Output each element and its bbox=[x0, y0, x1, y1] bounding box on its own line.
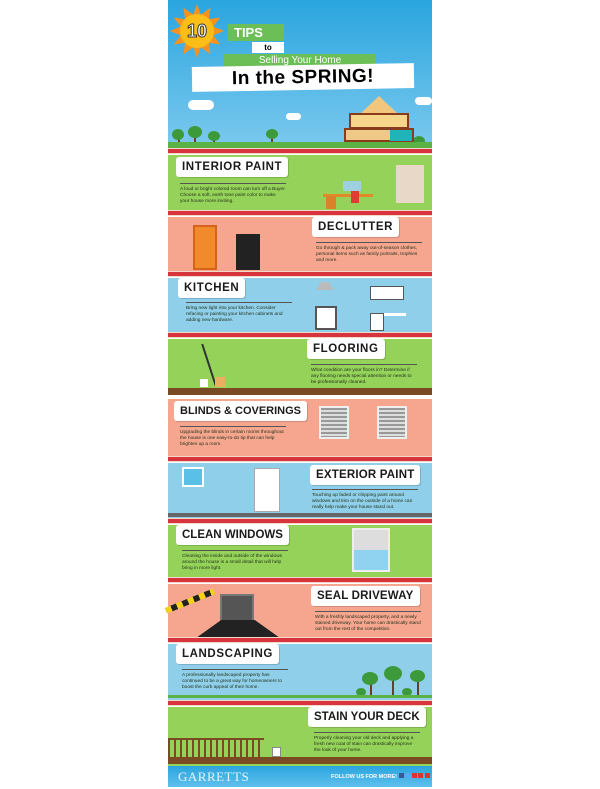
panel: exterior paint bbox=[168, 463, 432, 519]
heading bbox=[176, 644, 279, 664]
heading bbox=[176, 525, 289, 545]
icon: closet bbox=[236, 234, 260, 270]
icon: broom bbox=[201, 344, 217, 386]
text block: Cleaning the inside and outside of the windows around the house is a small detail that will help bring in more light. bbox=[182, 554, 282, 571]
title: to: to bbox=[264, 43, 272, 52]
text block: What condition are your floors in? Determine if any flooring needs special attention or needs to be professionally cleaned. bbox=[311, 368, 412, 385]
heading bbox=[178, 278, 245, 298]
title: Selling Your Home: Selling Your Home bbox=[259, 55, 341, 66]
floor bbox=[168, 388, 432, 395]
icon: window bbox=[182, 467, 204, 487]
icon: cabinets bbox=[370, 286, 404, 300]
heading: INTERIOR PAINT bbox=[182, 161, 282, 173]
panel: flooring bbox=[168, 339, 432, 395]
icon: bookshelf bbox=[193, 225, 217, 270]
panel: kitchen bbox=[168, 278, 432, 333]
title: to bbox=[252, 42, 284, 53]
footer bbox=[168, 766, 432, 787]
panel: clean windows bbox=[168, 525, 432, 578]
heading bbox=[176, 157, 288, 177]
icon: desk and chair bbox=[323, 181, 373, 209]
text block: Upgrading the blinds in certain rooms throughout the house is one easy-to-do tip that can help brighten up a room. bbox=[180, 430, 284, 447]
panel: blinds & coverings bbox=[168, 399, 432, 456]
heading: EXTERIOR PAINT bbox=[316, 469, 414, 481]
header sky bbox=[168, 0, 432, 148]
panel: stain your deck bbox=[168, 707, 432, 766]
text block: A loud or bright colored room can turn off a Buyer. Choose a soft, earth tone paint color to make your house more inviting. bbox=[180, 187, 286, 204]
social follow bbox=[331, 773, 430, 780]
heading: FLOORING bbox=[313, 343, 378, 355]
text block: Properly cleaning your old deck and applying a fresh new coat of stain can drastically improve the look of your home. bbox=[314, 736, 413, 753]
text block: Bring new light into your kitchen. Consider refacing or painting your kitchen cabinets and adding new hardware. bbox=[186, 306, 283, 323]
title: In the SPRING bbox=[192, 63, 414, 92]
text block: A professionally landscaped property has continued to be a great way for homeowners to boost the curb appeal of their home. bbox=[182, 673, 282, 690]
panel: interior paint bbox=[168, 155, 432, 210]
text block: Touching up faded or chipping paint around windows and trim on the outside of a home can really help make your house stand out. bbox=[312, 493, 412, 510]
heading: LANDSCAPING bbox=[182, 648, 273, 660]
clouds bbox=[188, 100, 214, 110]
heading bbox=[310, 465, 420, 485]
icon: garage and driveway bbox=[220, 594, 254, 622]
heading bbox=[311, 586, 420, 606]
icon: sun with 10 bbox=[170, 4, 224, 58]
heading: CLEAN WINDOWS bbox=[182, 529, 283, 541]
panel: landscaping bbox=[168, 644, 432, 701]
logo: GARRETTS bbox=[178, 769, 249, 784]
icon: stove and hood bbox=[316, 282, 334, 290]
heading bbox=[174, 401, 307, 421]
heading: BLINDS & COVERINGS bbox=[180, 405, 301, 417]
heading: KITCHEN bbox=[184, 282, 239, 294]
panel: declutter bbox=[168, 217, 432, 272]
icon: paint roller wall bbox=[396, 165, 424, 203]
title: TIPS bbox=[228, 24, 284, 41]
heading bbox=[308, 707, 426, 727]
heading: STAIN YOUR DECK bbox=[314, 711, 420, 723]
icon: door bbox=[254, 468, 280, 512]
title: TIPS: TIPS bbox=[234, 25, 263, 40]
social follow: FOLLOW US FOR MORE! bbox=[331, 774, 397, 780]
icon: paint can bbox=[272, 747, 281, 757]
text block: With a freshly landscaped property, and a newly stained driveway. Your home can drastically stand out from the rest of the competition. bbox=[315, 615, 421, 632]
icon: trees bbox=[356, 666, 425, 695]
text block: Go through & pack away out-of-season clothes, personal items such as family portraits, trophies and more. bbox=[316, 246, 417, 263]
title: Selling Your Home bbox=[224, 54, 376, 68]
title: In the SPRING: In the SPRING! bbox=[232, 66, 374, 89]
heading bbox=[312, 217, 399, 237]
ground bbox=[168, 142, 432, 148]
panel: seal driveway bbox=[168, 584, 432, 638]
icon: window bbox=[352, 528, 390, 572]
icon: caution stripe bbox=[165, 588, 215, 614]
icon: sun with 10: 10 bbox=[187, 21, 207, 41]
heading bbox=[307, 339, 384, 359]
heading: SEAL DRIVEWAY bbox=[317, 590, 414, 602]
icon: blinds windows bbox=[319, 406, 349, 439]
trees bbox=[172, 126, 425, 142]
heading: DECLUTTER bbox=[318, 221, 393, 233]
icon: house cross-section bbox=[344, 96, 414, 142]
icon: deck railing bbox=[168, 738, 264, 757]
